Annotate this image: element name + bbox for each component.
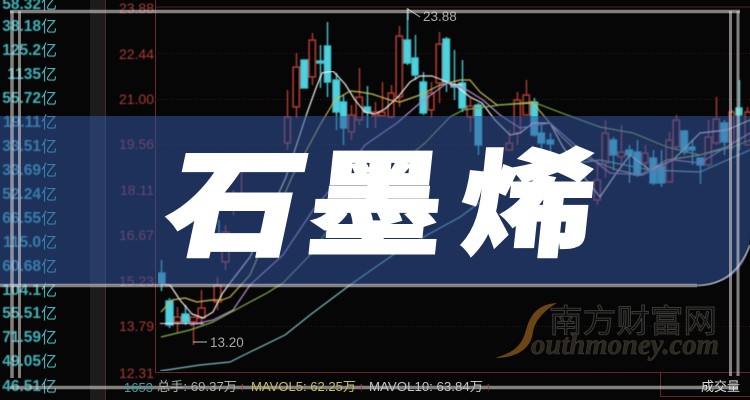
volume legend row: ↑ bbox=[239, 379, 246, 394]
volume legend row: MAVOL10: 63.84万 bbox=[369, 379, 483, 394]
MA10 yellow bbox=[161, 80, 750, 312]
red candles bbox=[174, 26, 750, 345]
translucent blue band bbox=[0, 116, 750, 285]
price axis labels: 18.11 bbox=[120, 182, 154, 198]
volume legend row: ↑ bbox=[485, 379, 492, 394]
left column: unit characters: 亿 bbox=[41, 114, 57, 132]
price axis labels: 19.56 bbox=[119, 136, 154, 152]
left column: unit characters: 亿 bbox=[41, 138, 57, 156]
MA30 green bbox=[161, 102, 750, 337]
left column: turnover values: 104.1 bbox=[2, 282, 41, 299]
left column: turnover values: 33.69 bbox=[2, 162, 41, 179]
watermark: southmoney bbox=[495, 303, 719, 361]
high price marker bbox=[408, 9, 457, 24]
left column: unit characters: 亿 bbox=[41, 42, 57, 60]
price axis labels: 13.79 bbox=[119, 318, 154, 334]
watermark: southmoney: 南方财富网 bbox=[549, 303, 717, 339]
left column: unit characters: 亿 bbox=[41, 18, 57, 36]
left column: turnover values: 52.24 bbox=[2, 186, 41, 203]
volume legend row: MAVOL5: 62.25万 bbox=[251, 379, 356, 394]
left column: unit characters: 亿 bbox=[41, 258, 57, 276]
low price marker: 13.20 bbox=[210, 335, 244, 350]
price axis labels: 16.67 bbox=[119, 227, 154, 243]
left column: turnover values: 38.18 bbox=[2, 18, 41, 35]
left column: unit characters: 亿 bbox=[41, 234, 57, 252]
cyan candles bbox=[158, 8, 742, 328]
left column: unit characters: 亿 bbox=[41, 186, 57, 204]
left column: turnover values: 49.05 bbox=[2, 353, 41, 370]
left column: unit characters: 亿 bbox=[41, 210, 57, 228]
watermark: southmoney: outhmoney.com bbox=[531, 328, 719, 361]
volume legend row: 1653 bbox=[124, 380, 153, 395]
title character two: 墨 bbox=[302, 141, 451, 271]
left column: turnover values: 71.59 bbox=[2, 329, 41, 346]
title character three: 烯 bbox=[453, 141, 602, 271]
title: graphene bbox=[155, 141, 602, 271]
flat markers bbox=[160, 84, 462, 324]
price axis labels: 23.88 bbox=[119, 0, 154, 16]
MA20 purple bbox=[190, 83, 750, 325]
left column: unit characters: 亿 bbox=[41, 66, 57, 84]
volume legend row: ↑ bbox=[358, 379, 364, 394]
price axis labels: 15.23 bbox=[119, 273, 154, 289]
left column: unit characters: 亿 bbox=[41, 282, 57, 300]
left column: turnover values: 125.2 bbox=[2, 42, 41, 59]
volume legend row: 成交量 bbox=[701, 379, 740, 394]
high price marker: 23.88 bbox=[423, 9, 457, 24]
left column: turnover values: 1135 bbox=[7, 66, 41, 83]
left column: unit characters bbox=[41, 0, 57, 396]
MA5 white bbox=[161, 71, 750, 318]
left column: turnover values: 55.51 bbox=[2, 305, 41, 322]
candlestick chart bbox=[158, 8, 750, 345]
moving average lines bbox=[160, 71, 750, 371]
left column: unit characters: 亿 bbox=[41, 329, 57, 347]
left column: turnover values: 66.55 bbox=[2, 210, 41, 227]
volume legend row: 总手: 69.37万 bbox=[157, 379, 237, 394]
watermark swoosh bbox=[495, 303, 557, 358]
price axis labels bbox=[119, 0, 154, 381]
volume legend row bbox=[124, 379, 740, 395]
left column: turnover values: 33.51 bbox=[2, 138, 41, 155]
price axis labels: 22.44 bbox=[119, 46, 154, 62]
left column: turnover values: 55.72 bbox=[2, 90, 41, 107]
left column: unit characters: 亿 bbox=[41, 90, 57, 108]
left column: unit characters: 亿 bbox=[41, 305, 57, 323]
left column: turnover values: 46.51 bbox=[2, 378, 41, 395]
left column: unit characters: 亿 bbox=[41, 353, 57, 371]
low price marker bbox=[193, 335, 244, 350]
left column: turnover values: 115.0 bbox=[3, 234, 41, 251]
left column: unit characters: 亿 bbox=[41, 162, 57, 180]
left column: unit characters: 亿 bbox=[41, 378, 57, 396]
title character one: 石 bbox=[155, 141, 317, 271]
left column: turnover values: 60.68 bbox=[2, 258, 41, 275]
price axis labels: 12.31 bbox=[119, 365, 154, 381]
left column: turnover values: 19.11 bbox=[3, 114, 41, 131]
left column: turnover values bbox=[2, 0, 41, 395]
price axis labels: 21.00 bbox=[119, 91, 154, 107]
MA60 teal bbox=[160, 150, 750, 371]
